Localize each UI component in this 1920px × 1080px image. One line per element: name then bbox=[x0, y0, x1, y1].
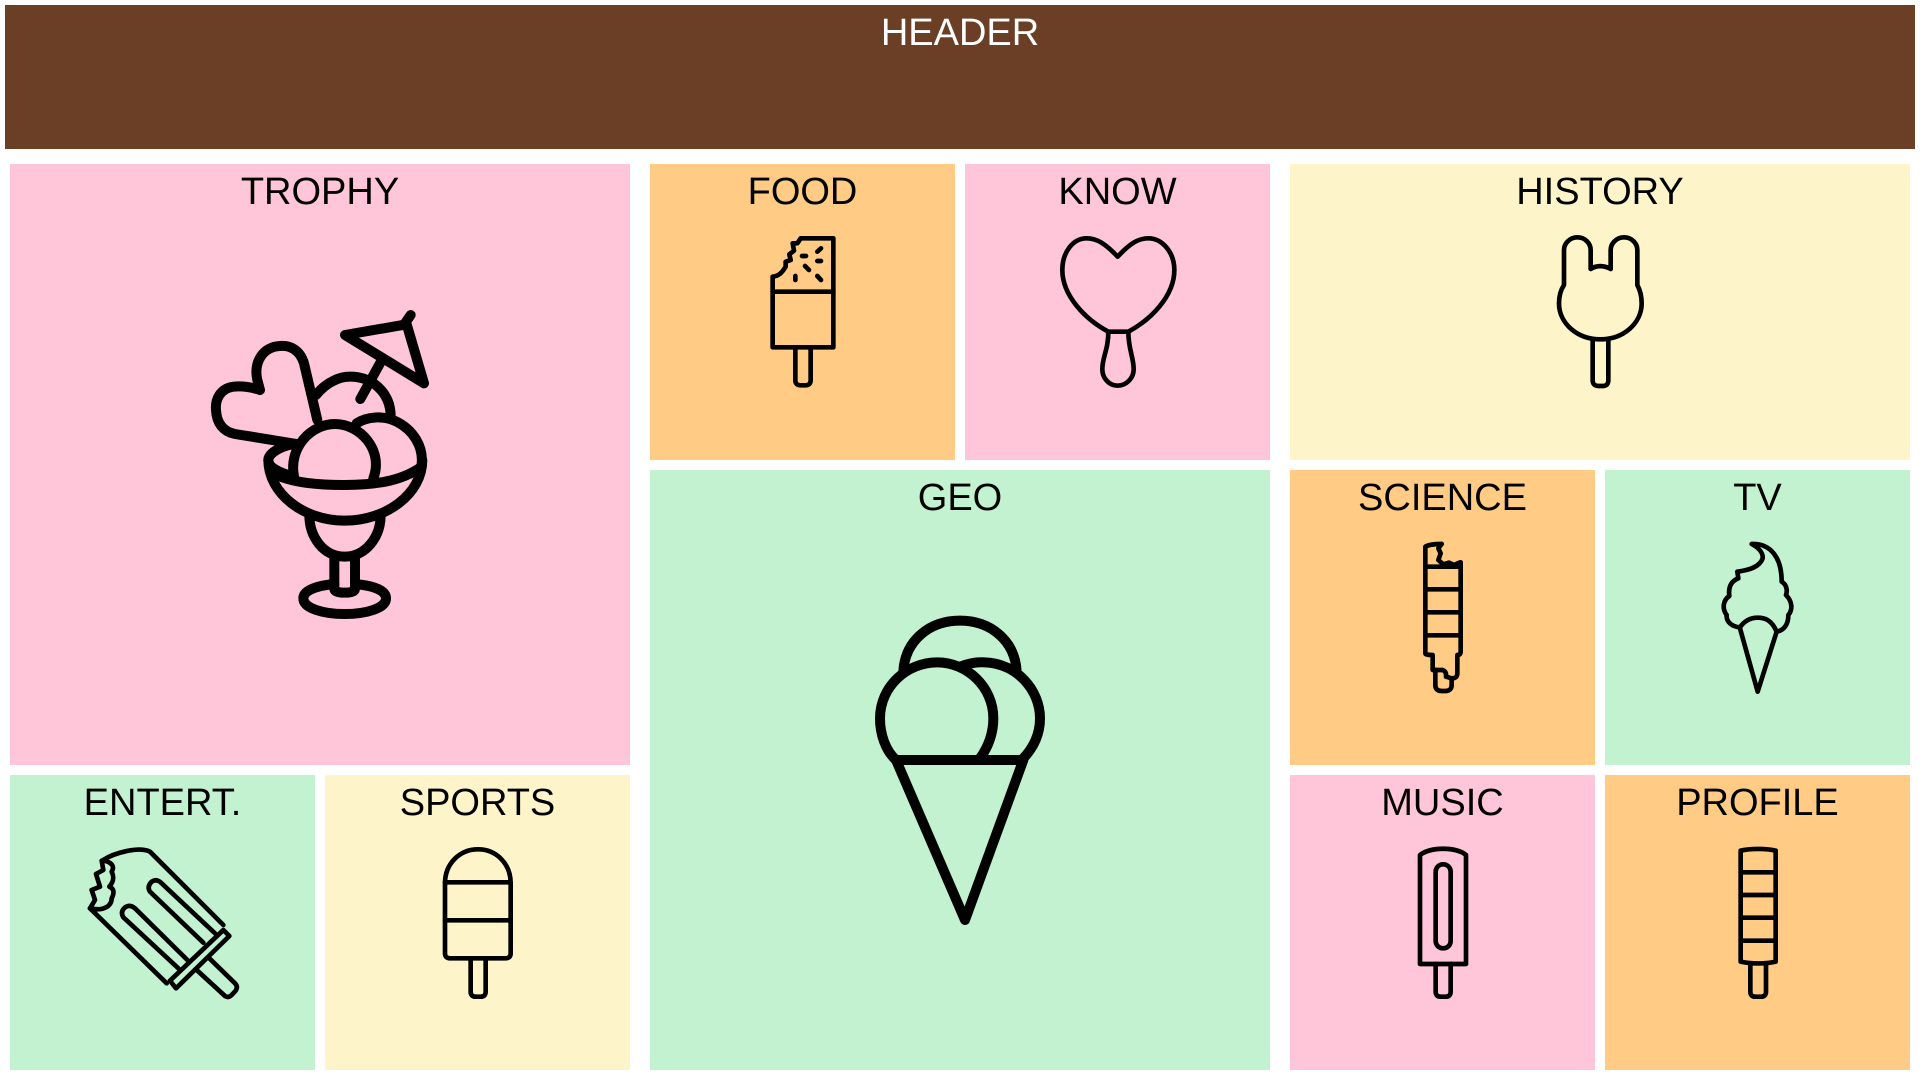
icon: sundae glass with scoops, heart wafer and umbrella bbox=[210, 310, 429, 619]
heading: tv: TV bbox=[1733, 477, 1782, 519]
panel: profile bbox=[1605, 775, 1910, 1070]
icon: bitten ice cream bar with sprinkles bbox=[770, 236, 836, 388]
heading: know: KNOW bbox=[1058, 171, 1177, 213]
icon: striped ice lolly bbox=[1738, 846, 1778, 999]
panel: science bbox=[1290, 470, 1595, 765]
panel: geo bbox=[650, 470, 1270, 1070]
panel: food bbox=[650, 164, 955, 460]
panel: header bbox=[5, 5, 1915, 149]
heading: food: FOOD bbox=[748, 171, 857, 213]
heading: header: HEADER bbox=[881, 12, 1039, 54]
panel: history bbox=[1290, 164, 1910, 460]
heading: trophy: TROPHY bbox=[241, 171, 399, 213]
icon: soft serve cone bbox=[1721, 542, 1794, 694]
icon: bunny ear ice lolly bbox=[1556, 235, 1644, 388]
heading: sports: SPORTS bbox=[400, 782, 555, 824]
heading: entert: ENTERT. bbox=[84, 782, 241, 824]
icon: striped melting ice lolly bbox=[1423, 542, 1463, 694]
panel: music bbox=[1290, 775, 1595, 1070]
panel: tv bbox=[1605, 470, 1910, 765]
panel: trophy bbox=[10, 164, 630, 765]
panel: entert bbox=[10, 775, 315, 1070]
panel: sports bbox=[325, 775, 630, 1070]
heading: music: MUSIC bbox=[1381, 782, 1504, 824]
icon: three scoop ice cream cone bbox=[875, 616, 1045, 925]
icon: ice lolly with centre capsule bbox=[1418, 846, 1468, 999]
icon: heart shaped ice lolly bbox=[1060, 236, 1177, 388]
panel: know bbox=[965, 164, 1270, 460]
heading: profile: PROFILE bbox=[1676, 782, 1839, 824]
heading: geo: GEO bbox=[918, 477, 1002, 519]
heading: science: SCIENCE bbox=[1358, 477, 1527, 519]
icon: rounded three part ice lolly bbox=[442, 847, 513, 999]
icon: tilted bitten ice lolly bbox=[88, 847, 240, 1000]
heading: history: HISTORY bbox=[1516, 171, 1684, 213]
